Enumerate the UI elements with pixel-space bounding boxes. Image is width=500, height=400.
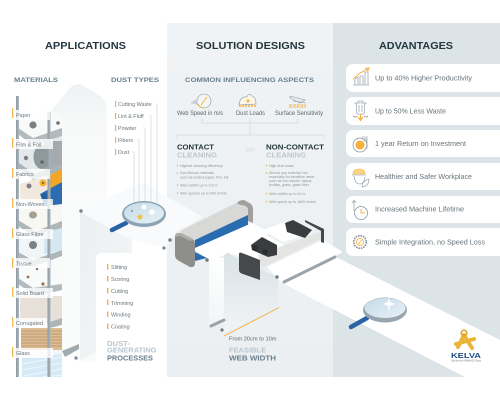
illustration: non-contact cleaning machine (239, 220, 343, 283)
heading: dust types: DUST TYPES (111, 77, 160, 84)
process card: Winding (111, 312, 130, 318)
rear plate (305, 220, 324, 243)
heading: applications: APPLICATIONS (45, 40, 126, 52)
or divider: OR (246, 148, 255, 154)
advantage card: productivity: Up to 40% Higher Productivity (375, 76, 473, 82)
process card (96, 253, 167, 377)
tall white web (50, 84, 107, 214)
icon: magnifier clean (351, 296, 407, 327)
solid board (20, 296, 62, 325)
contact cleaning column: CLEANING (177, 150, 217, 160)
glass (22, 350, 62, 377)
end cap left (175, 233, 195, 267)
icon: magnifier with dust (112, 201, 166, 230)
non-contact cleaning column: CLEANING (266, 150, 306, 160)
non-contact cleaning column: Web speed up to 1800 m/min (269, 200, 316, 204)
contact cleaning column: Web speeds up to 800 m/min (180, 192, 227, 196)
material labels: Paper (16, 113, 31, 119)
illustration: feasible web width sheet (220, 233, 284, 333)
contact cleaning column: Web widths up to 3.5 m (180, 184, 218, 188)
material labels (12, 108, 53, 358)
glass fibre (18, 228, 62, 260)
web width label: From 20cm to 10m (229, 336, 277, 342)
logo: kelva (451, 330, 482, 362)
end cap right (237, 200, 253, 223)
dust type list: Fibers (118, 138, 133, 144)
heading: solution designs: SOLUTION DESIGNS (196, 40, 305, 52)
process card: Coating (111, 324, 130, 330)
icon: web speed gauge (190, 94, 211, 108)
non-woven (18, 204, 62, 231)
dust type list: Dust (118, 150, 130, 156)
advantage card: return on investment: 1 year Return on Investment (375, 141, 466, 148)
dust type list: Lint & Fluff (118, 114, 144, 120)
material labels: Glass (16, 351, 30, 357)
flat web plane (78, 183, 203, 247)
contact cleaning column: such as coated paper, film, foil (180, 176, 229, 180)
contact cleaning column: Non-fibrous materials (180, 171, 214, 175)
advantage card: productivity (346, 64, 500, 92)
material labels: Non-Woven (16, 202, 44, 208)
contact cleaning column: CONTACT (177, 142, 214, 152)
fabrics (20, 176, 50, 206)
process card: Scoring (111, 277, 129, 283)
panel: applications background (0, 23, 167, 377)
process card: Trimming (111, 301, 133, 307)
material labels: Corrugated (16, 321, 43, 327)
heading: materials: MATERIALS (14, 77, 59, 84)
corrugated (21, 328, 62, 350)
process card: Cutting (111, 289, 128, 295)
machine body (180, 201, 250, 246)
material labels: Film & Foil (16, 142, 41, 148)
front dark plate (239, 253, 260, 280)
contact cleaning column: Highest cleaning efficiency (180, 164, 223, 168)
contact cleaning column (177, 142, 229, 196)
non-contact cleaning column: especially for sensitive webs (269, 175, 315, 179)
non-contact cleaning column: NON-CONTACT (266, 142, 324, 152)
advantage card: machine lifetime (346, 196, 500, 223)
film and foil (18, 136, 62, 176)
heading: dust-generating processes: PROCESSES (107, 354, 153, 362)
paper (18, 110, 62, 139)
non-contact cleaning column: Almost any material, but (269, 171, 308, 175)
advantage card: machine lifetime: Increased Machine Lifetime (375, 206, 464, 214)
hanging web (209, 258, 224, 327)
illustration: machine web path (50, 84, 203, 362)
panel: white band to the right (282, 257, 500, 377)
heading: dust-generating processes: GENERATING (107, 346, 157, 354)
advantage card: waste (346, 97, 500, 125)
tissue (18, 256, 62, 290)
heading: dust-generating processes: DUST- (107, 339, 131, 348)
outgoing white web (267, 240, 343, 283)
web width label: WEB WIDTH (229, 354, 276, 362)
aspect labels: Surface Sensitivity (275, 110, 324, 117)
panel: solution designs background (167, 23, 333, 377)
advantage card: simple integration (346, 228, 500, 256)
heading: advantages: ADVANTAGES (379, 40, 453, 52)
icon: dust loads (239, 94, 257, 106)
sensor body (258, 232, 323, 268)
dust type list: Powder (118, 126, 136, 132)
advantage card: return on investment (346, 130, 500, 157)
white sheet behind sensor (263, 222, 310, 242)
icon: surface sensitivity (289, 96, 306, 107)
illustration: contact cleaning machine (175, 200, 270, 327)
roller (284, 257, 335, 282)
logo: kelva: KELVA (451, 351, 482, 360)
material labels: Fabrics (16, 172, 34, 178)
advantage card: healthier workplace: Healthier and Safer Workplace (375, 174, 472, 181)
web width label (229, 336, 277, 362)
aspect labels (177, 110, 324, 117)
dust type list: Cutting Waste (118, 102, 152, 108)
rails (16, 96, 19, 377)
material labels: Solid Board (16, 291, 44, 297)
heading: common influencing aspects: COMMON INFLUENCING ASPECTS (185, 77, 315, 84)
process card: Slitting (111, 265, 127, 271)
connector lines (177, 118, 324, 139)
advantage card: waste: Up to 50% Less Waste (375, 108, 446, 116)
web width label: FEASIBLE (229, 346, 266, 354)
dimension arrow (224, 308, 279, 336)
non-contact cleaning column: Web widths up to 10 m (269, 192, 306, 196)
rear sensor head (285, 220, 312, 238)
heading: dust-generating processes (107, 339, 157, 362)
advantage card: simple integration: Simple Integration, no Speed Loss (375, 240, 486, 246)
dust type list (115, 101, 157, 206)
logo: kelva: Solutions for HOMMAGE Group (451, 360, 482, 362)
illustration: materials stack (16, 96, 62, 377)
aspect labels: Web Speed in m/s (177, 110, 223, 117)
non-contact cleaning column: such as non-woven, tissue, (269, 179, 312, 183)
non-contact cleaning column: textiles, glass, glass fiber (269, 183, 310, 187)
front sensor head (251, 237, 277, 257)
non-contact cleaning column (266, 142, 324, 204)
non-contact cleaning column: High dust loads (269, 164, 294, 168)
panel: advantages background (333, 23, 500, 377)
material labels: Glass Fibre (16, 232, 44, 238)
material labels: Tissue (16, 262, 32, 268)
aspect labels: Dust Loads (236, 110, 265, 117)
advantage card: healthier workplace (346, 163, 500, 190)
